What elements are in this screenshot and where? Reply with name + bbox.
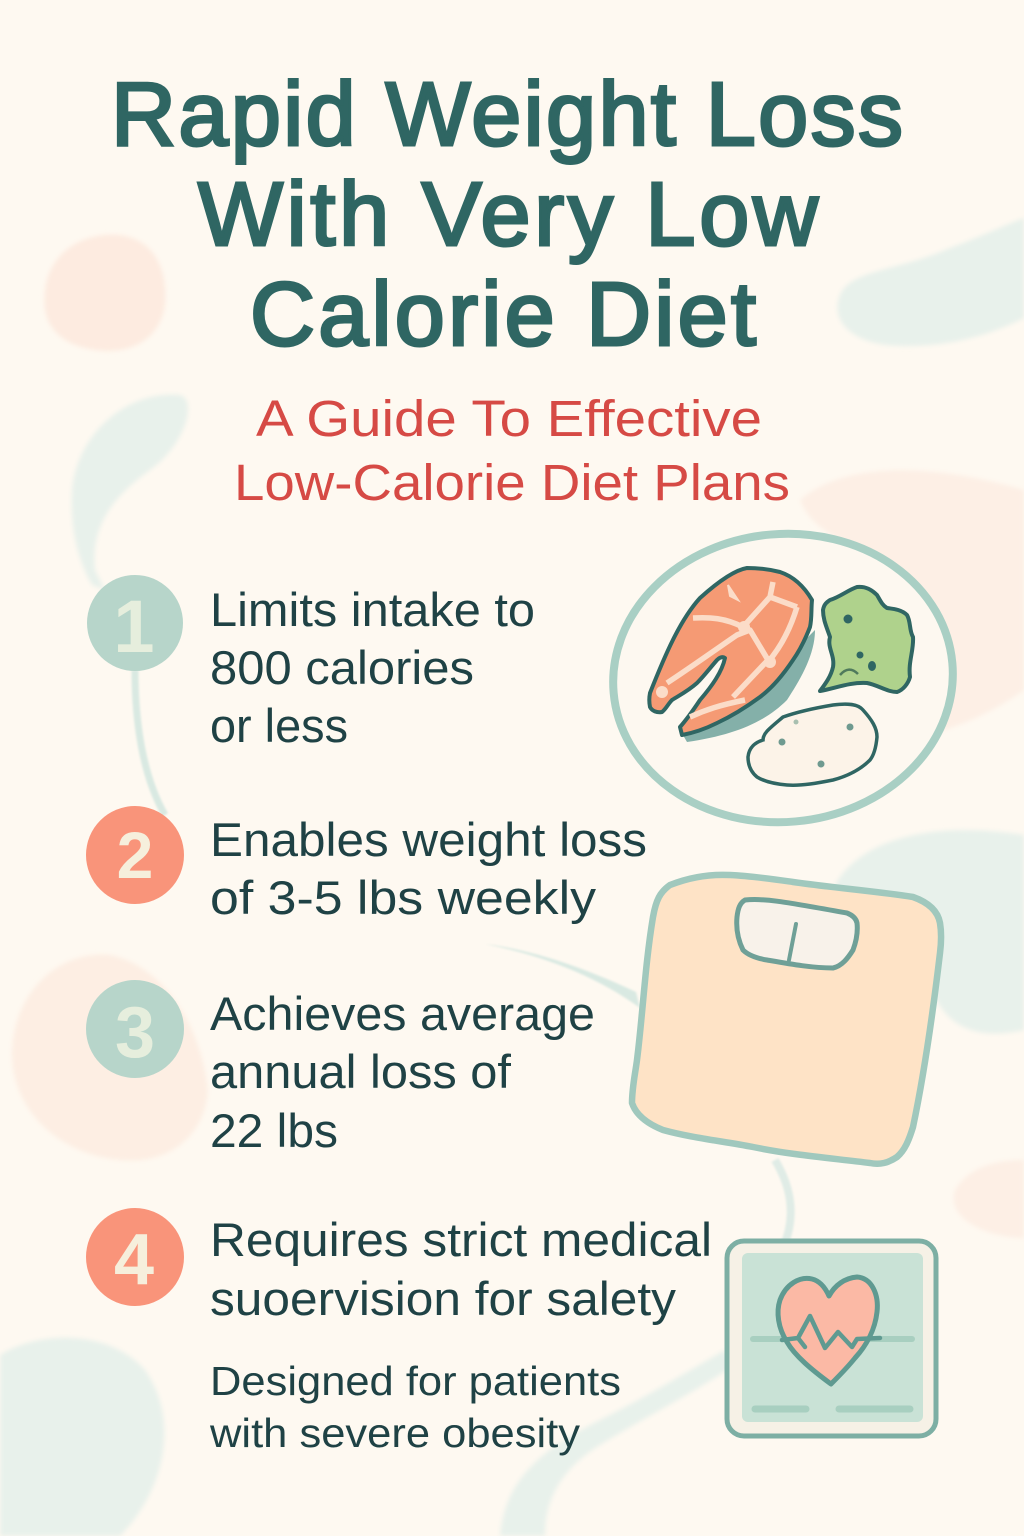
step 3 badge (86, 980, 184, 1078)
step 1 text: or less (210, 699, 348, 752)
subtitle: A Guide To Effective (256, 390, 762, 447)
step 3 text: annual loss of (210, 1045, 512, 1098)
step 1 text: Limits intake to (210, 583, 535, 636)
subtitle: Low-Calorie Diet Plans (234, 454, 790, 511)
step 4 badge (86, 1208, 184, 1306)
title (111, 65, 903, 365)
step 3 text: 22 lbs (210, 1104, 338, 1157)
icon: heart monitor (727, 1241, 936, 1436)
icon: bathroom scale (632, 875, 941, 1164)
potato (748, 704, 877, 785)
heart (778, 1277, 877, 1384)
note text: Designed for patients (210, 1358, 621, 1404)
step 2 text (210, 813, 647, 924)
step 1 badge: 1 (113, 585, 155, 668)
step 4 text (210, 1213, 712, 1325)
title: Calorie Diet (250, 265, 756, 365)
scale display (737, 900, 857, 968)
connector lines (135, 670, 791, 1250)
step 2 text: of 3-5 lbs weekly (210, 871, 597, 924)
note text: with severe obesity (209, 1410, 581, 1456)
step 3 text (210, 987, 595, 1157)
title: With Very Low (198, 165, 819, 265)
salmon shadow (680, 630, 815, 742)
note text (209, 1358, 621, 1456)
broccoli (820, 587, 913, 692)
title: Rapid Weight Loss (111, 65, 903, 165)
step 2 badge (86, 806, 184, 904)
icon: plate with salmon, broccoli and potato (601, 520, 965, 836)
step 3 badge: 3 (115, 993, 155, 1073)
salmon (649, 568, 812, 735)
step 2 badge: 2 (117, 818, 153, 892)
step 4 badge: 4 (114, 1220, 154, 1300)
step 4 text: suoervision for salety (210, 1272, 677, 1325)
step 3 text: Achieves average (210, 987, 595, 1040)
step 4 text: Requires strict medical (210, 1213, 712, 1266)
step 1 badge (87, 575, 183, 671)
step 1 text (210, 583, 535, 752)
subtitle (234, 390, 790, 511)
step 2 text: Enables weight loss (210, 813, 647, 866)
step 1 text: 800 calories (210, 641, 474, 694)
